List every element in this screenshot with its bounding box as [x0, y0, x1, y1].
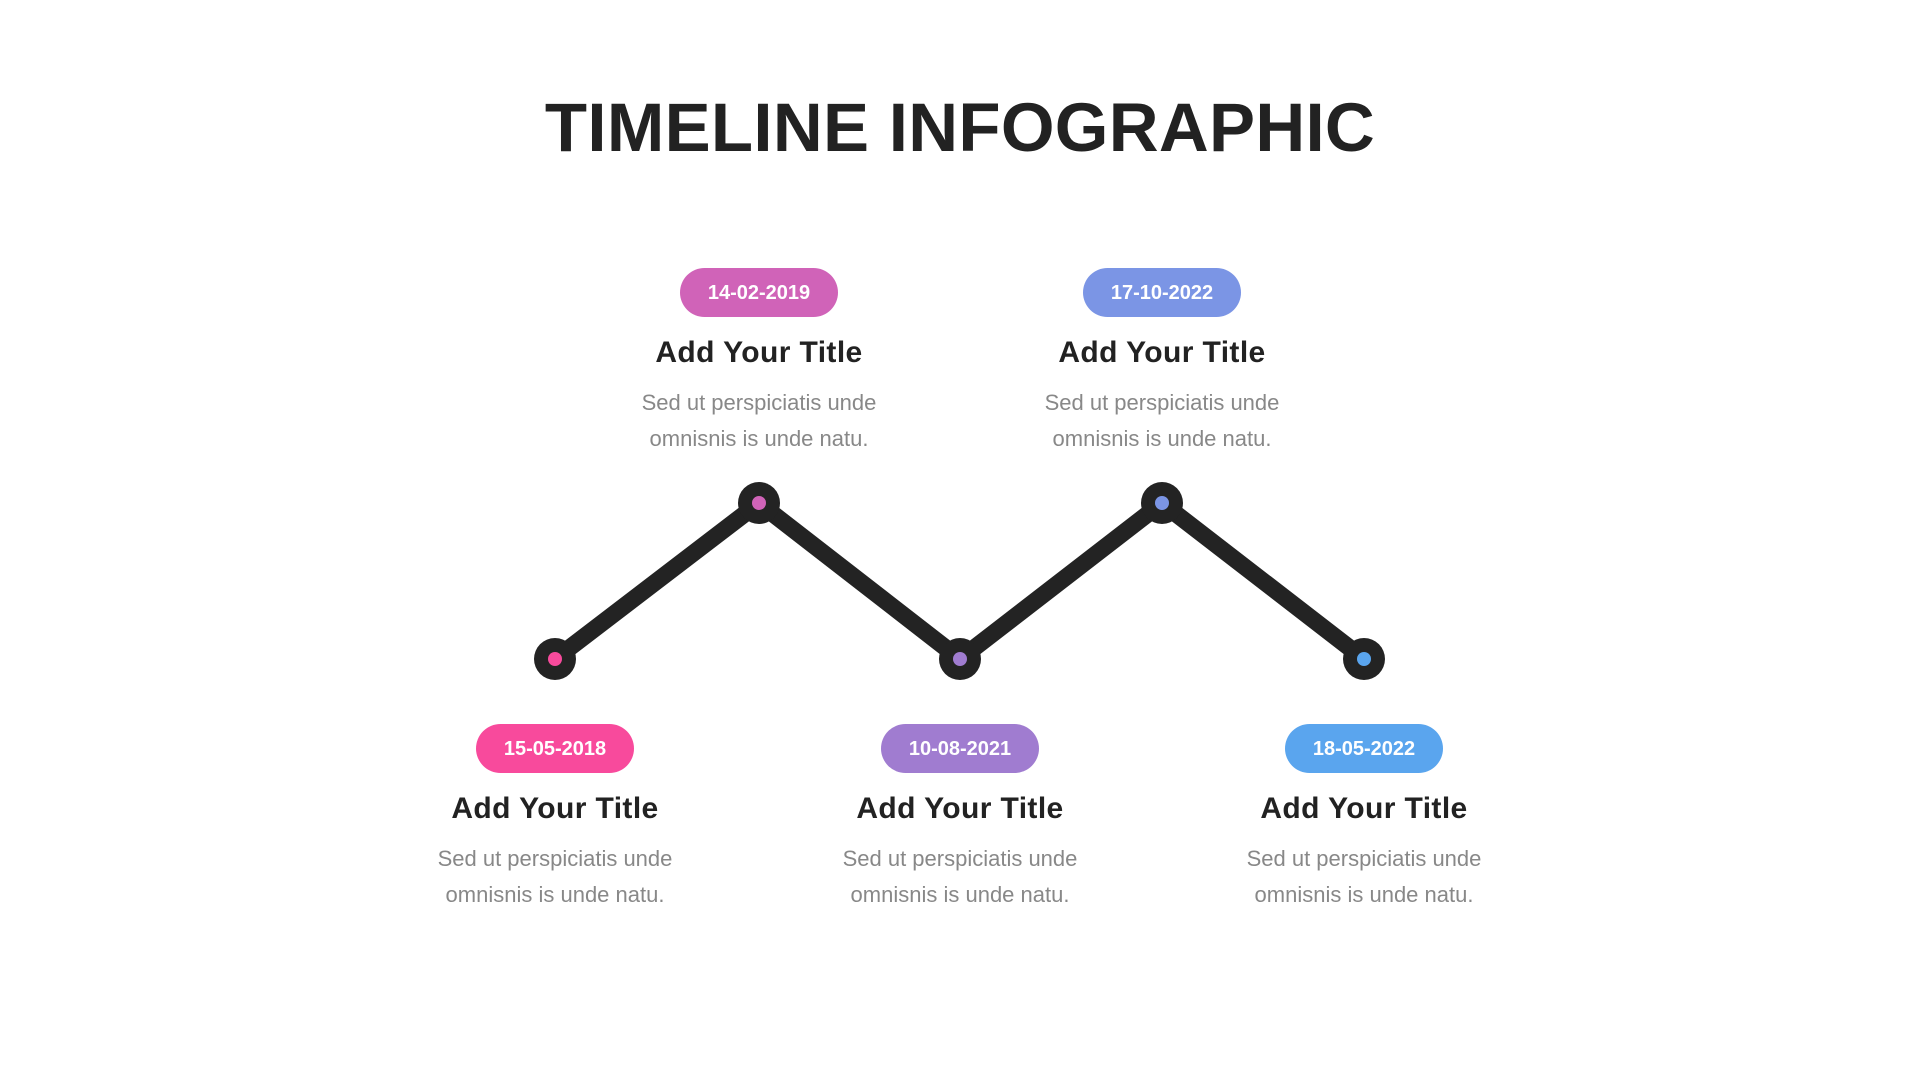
title: TIMELINE INFOGRAPHIC — [545, 89, 1375, 166]
milestone 2021 — [843, 724, 1077, 907]
milestone 2019: Add Your Title — [655, 336, 863, 369]
milestone 2018: 15-05-2018 — [504, 738, 606, 760]
milestone 2022 bottom: Sed ut perspiciatis unde — [1247, 846, 1481, 871]
milestone 2022 bottom: omnisnis is unde natu. — [1255, 882, 1473, 907]
milestone 2019: Sed ut perspiciatis unde — [642, 390, 876, 415]
milestone 2022 top: Add Your Title — [1058, 336, 1266, 369]
milestone 2018: Add Your Title — [451, 792, 659, 825]
milestone 2021: Add Your Title — [856, 792, 1064, 825]
milestone 2021: omnisnis is unde natu. — [851, 882, 1069, 907]
milestone 2021: 10-08-2021 — [909, 738, 1011, 760]
milestone 2022 bottom — [1247, 724, 1481, 907]
milestone 2022 top: 17-10-2022 — [1111, 282, 1213, 304]
milestone 2018: omnisnis is unde natu. — [446, 882, 664, 907]
milestone 2022 top: omnisnis is unde natu. — [1053, 426, 1271, 451]
milestone 2022 bottom: Add Your Title — [1260, 792, 1468, 825]
milestone 2021: Sed ut perspiciatis unde — [843, 846, 1077, 871]
milestone 2022 bottom: 18-05-2022 — [1313, 738, 1415, 760]
milestone 2022 top: Sed ut perspiciatis unde — [1045, 390, 1279, 415]
milestone 2019: omnisnis is unde natu. — [650, 426, 868, 451]
milestone 2018: Sed ut perspiciatis unde — [438, 846, 672, 871]
milestone 2018 — [438, 724, 672, 907]
milestone 2022 top — [1045, 268, 1279, 451]
milestone 2019 — [642, 268, 876, 451]
milestone 2019: 14-02-2019 — [708, 282, 810, 304]
